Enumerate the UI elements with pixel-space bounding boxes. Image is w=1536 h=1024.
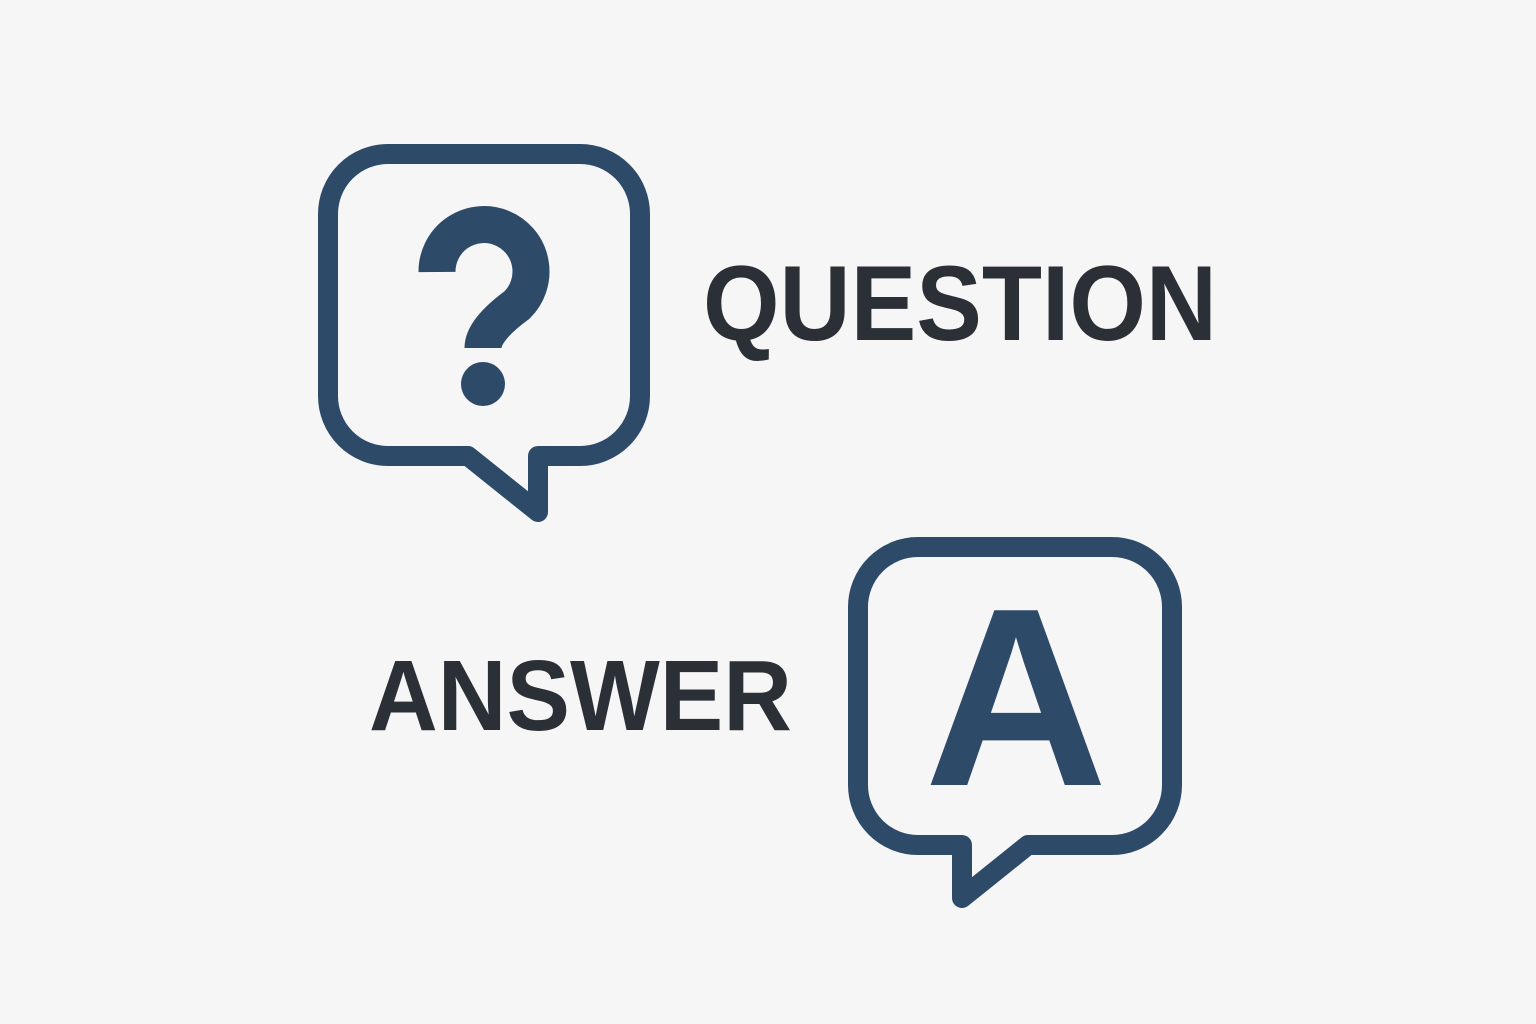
heading: QUESTION: QUESTION xyxy=(703,243,1217,363)
heading: ANSWER: ANSWER xyxy=(369,640,792,752)
icon: question bubble xyxy=(328,154,640,512)
question mark glyph xyxy=(437,225,531,406)
letter A glyph: A xyxy=(924,555,1108,839)
icon: answer bubble xyxy=(858,547,1172,898)
